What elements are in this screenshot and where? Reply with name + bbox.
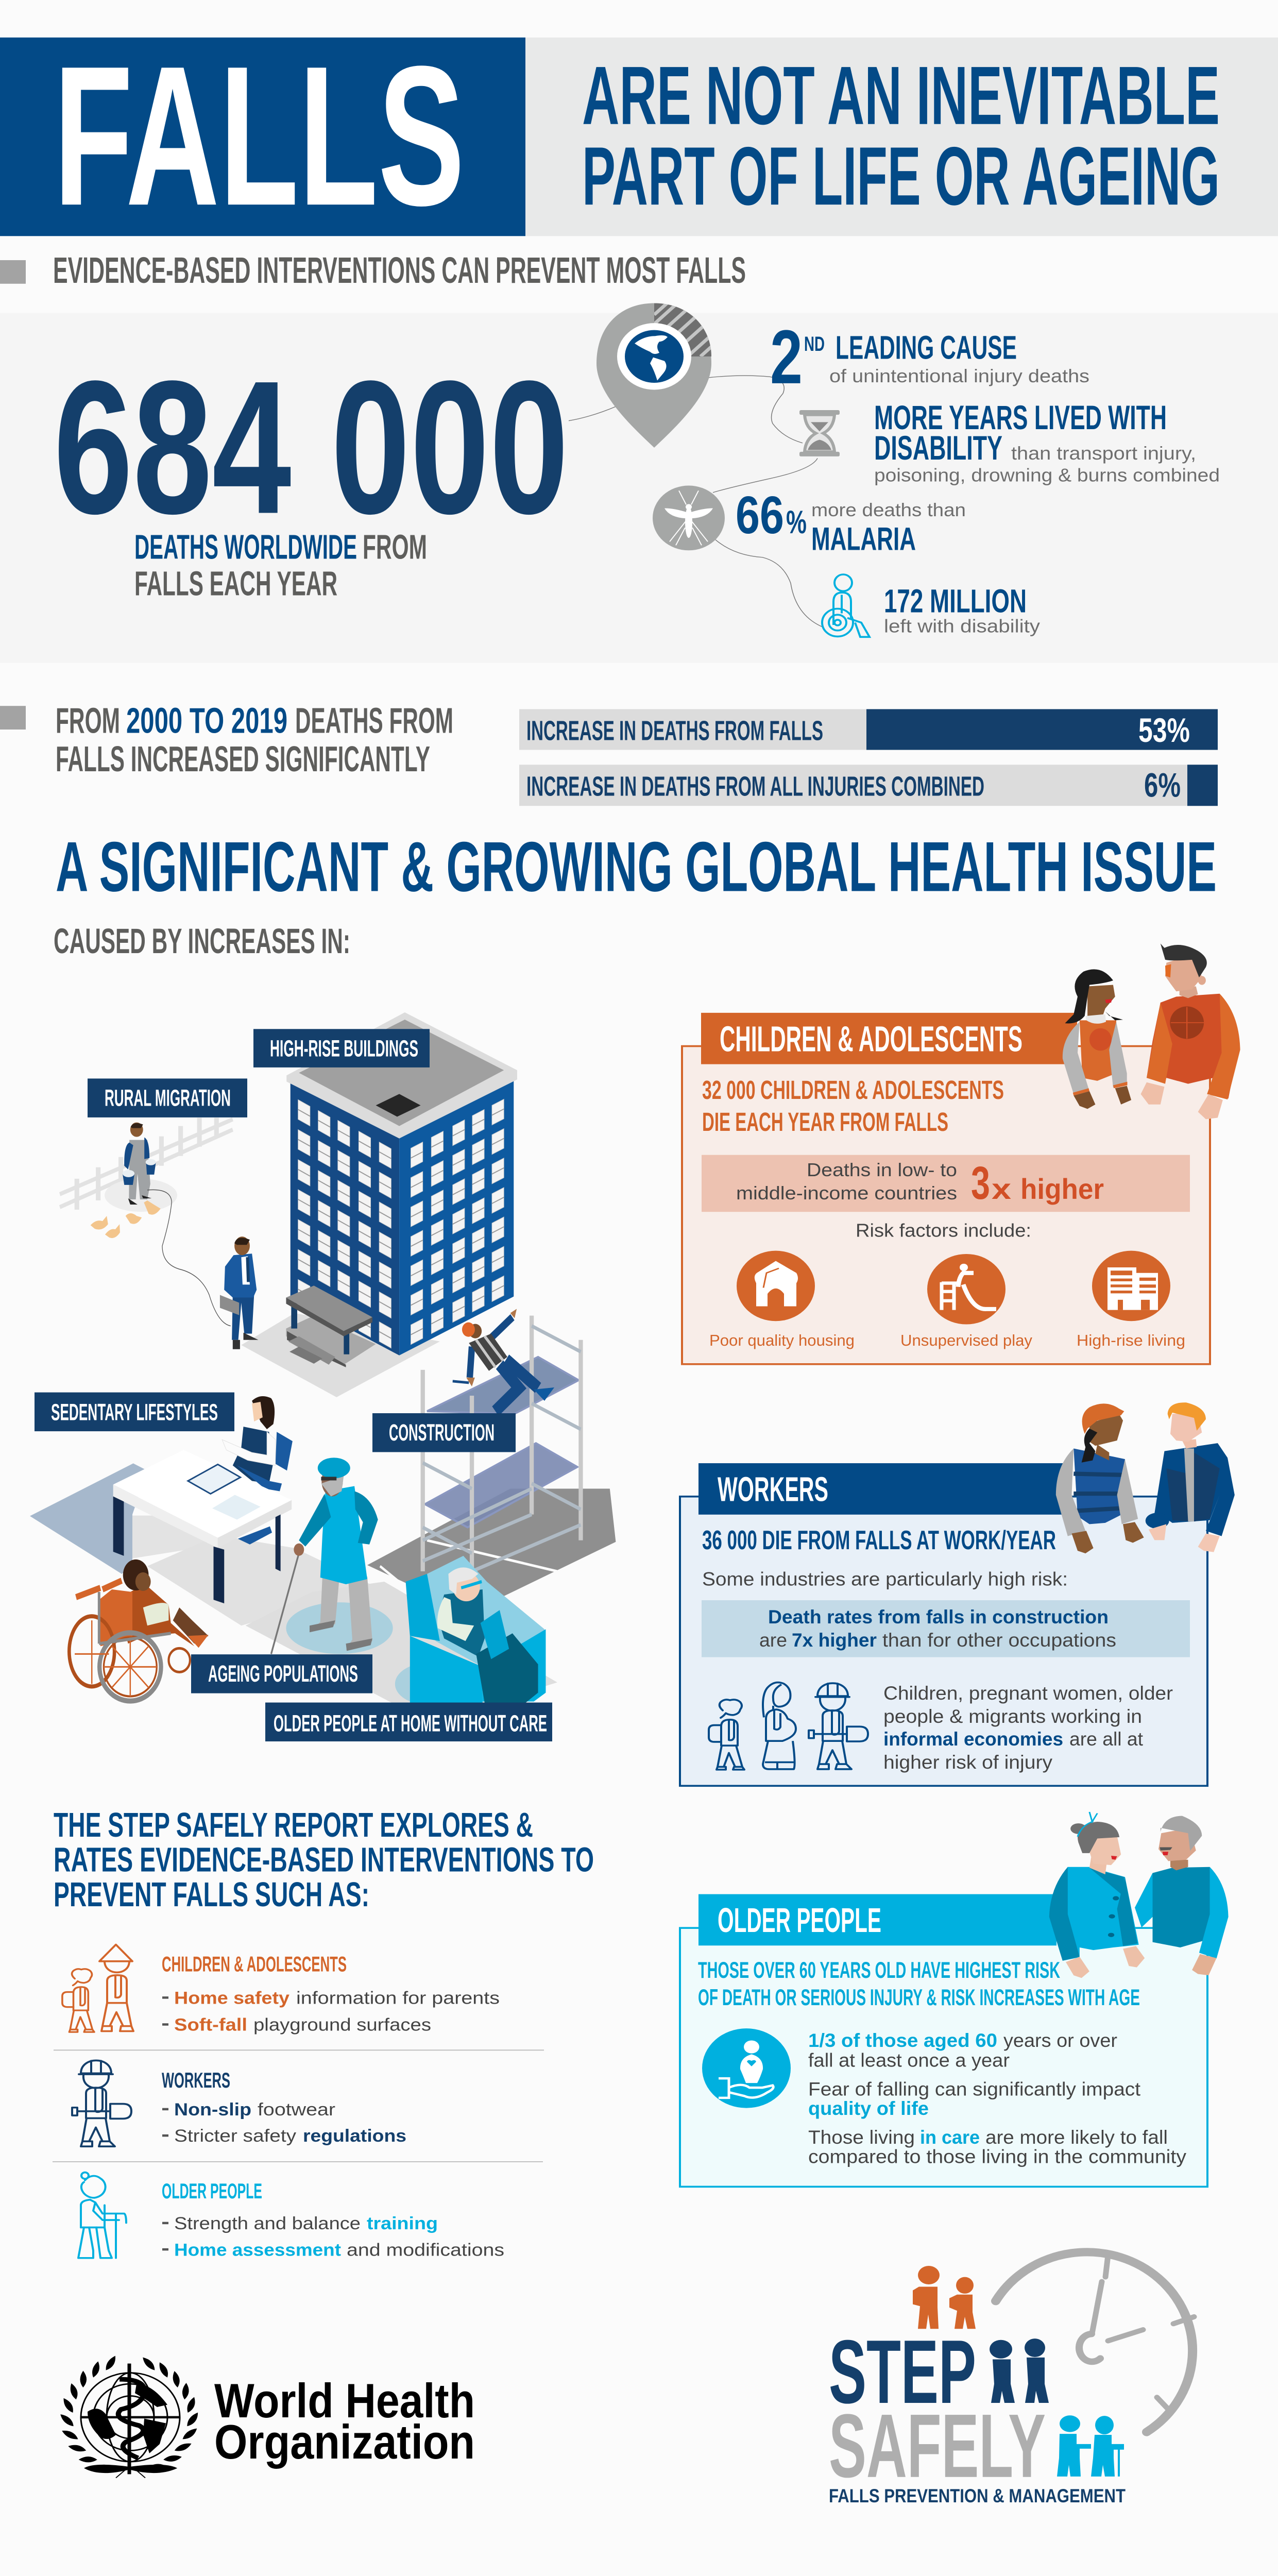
text: older people facts: Fear of falling can significantly impact xyxy=(808,2079,1140,2100)
callout: 7x higher: 7x higher xyxy=(792,1630,877,1651)
icon: mosquito xyxy=(653,485,725,550)
scaffolding xyxy=(423,1316,581,1571)
callout: 3x higher xyxy=(702,1155,1190,1212)
icon: hourglass xyxy=(799,410,840,456)
older woman in armchair xyxy=(395,1556,546,1705)
subheading: caused by: CAUSED BY INCREASES IN: xyxy=(54,922,350,961)
woman at desk xyxy=(222,1396,293,1545)
section: deaths increased 2000 to 2019 xyxy=(0,701,453,779)
older man with cane xyxy=(271,1458,393,1654)
callout: 7x higher xyxy=(702,1600,1190,1657)
wordmark: SAFELY: SAFELY xyxy=(829,2396,1046,2497)
text: informal economies: Children, pregnant women, older xyxy=(883,1683,1173,1704)
stat: 66% malaria: more deaths than xyxy=(811,500,966,520)
label: ageing populations xyxy=(191,1654,372,1693)
wordmark: Organization xyxy=(214,2415,475,2469)
canopy and steps xyxy=(286,1316,376,1365)
intervention text: WORKERS xyxy=(162,2069,230,2093)
icon: poor quality housing xyxy=(737,1251,815,1321)
heading: step safely report: THE STEP SAFELY REPORT EXPLORES & xyxy=(54,1806,533,1844)
stat: 2nd leading cause: ND xyxy=(804,332,825,355)
text: older people facts: compared to those living in the community xyxy=(808,2146,1187,2167)
panel header: CHILDREN & ADOLESCENTS xyxy=(720,1019,1023,1059)
businessman xyxy=(220,1236,259,1349)
section: deaths increased 2000 to 2019: DEATHS FROM xyxy=(295,701,453,740)
stat: 2nd leading cause: LEADING CAUSE xyxy=(836,330,1017,366)
wordmark: STEP: STEP xyxy=(829,2321,976,2422)
floors xyxy=(30,1313,616,1706)
icon: hand holding person with heart xyxy=(702,2028,791,2108)
risk factor labels: High-rise living xyxy=(1077,1331,1185,1349)
intervention: children and adolescents xyxy=(62,1944,500,2035)
key fact xyxy=(702,1076,1004,1137)
icon: worker xyxy=(72,2060,131,2146)
stat: 2nd leading cause: of unintentional injury deaths xyxy=(829,366,1089,387)
key fact: DIE EACH YEAR FROM FALLS xyxy=(702,1108,948,1137)
label: construction xyxy=(372,1413,516,1452)
icon: map pin with globe xyxy=(597,303,711,448)
key fact: 36 000 DIE FROM FALLS AT WORK/YEAR xyxy=(702,1525,1056,1555)
callout: 7x higher: than for other occupations xyxy=(882,1630,1116,1651)
panel header xyxy=(701,1013,1077,1064)
deaths caption: FROM xyxy=(363,528,427,566)
text: informal economies xyxy=(883,1683,1173,1773)
icons: child, pregnant woman, worker xyxy=(709,1683,868,1770)
bar chart: increase in deaths from falls: INCREASE IN DEATHS FROM FALLS xyxy=(526,715,823,747)
stat: 66% malaria: MALARIA xyxy=(811,521,916,557)
stat: 172 million xyxy=(884,583,1040,637)
intervention: older people xyxy=(78,2173,504,2260)
intervention text: Home safety xyxy=(174,1988,289,2008)
subtitle xyxy=(0,250,746,291)
label: older people at home without care: OLDER PEOPLE AT HOME WITHOUT CARE xyxy=(274,1710,547,1737)
callout: 7x higher: Death rates from falls in construction xyxy=(768,1607,1109,1628)
stat: 66% malaria: % xyxy=(786,504,807,540)
intervention text: regulations xyxy=(303,2126,406,2146)
text: older people facts: 1/3 of those aged 60 xyxy=(808,2030,997,2052)
label: high-rise buildings xyxy=(253,1029,430,1067)
panel: key statistics xyxy=(59,303,1219,638)
panel: workers xyxy=(680,1402,1235,1786)
bar chart: increase in deaths from all injuries: 6% xyxy=(1144,766,1181,804)
high-rise building xyxy=(286,1012,517,1367)
intervention text: Strength and balance xyxy=(174,2213,361,2233)
intro text: Some industries are particularly high risk: xyxy=(702,1569,1068,1590)
icon: person in wheelchair xyxy=(822,574,870,637)
icon: older person with cane xyxy=(78,2173,126,2258)
deaths caption: DEATHS WORLDWIDE xyxy=(134,528,357,566)
text: older people facts: are more likely to fall xyxy=(985,2127,1168,2148)
logo: Step Safely xyxy=(829,2252,1194,2507)
text: older people facts: in care xyxy=(920,2127,980,2148)
panel header: OLDER PEOPLE xyxy=(718,1901,881,1939)
fence xyxy=(60,1118,233,1210)
callout: 7x higher: are xyxy=(759,1630,787,1651)
text: older people facts: fall at least once a year xyxy=(808,2050,1010,2071)
panel header xyxy=(698,1463,1064,1515)
risk factors heading: Risk factors include: xyxy=(856,1221,1031,1241)
bar chart: increase in deaths from falls xyxy=(519,709,1218,750)
emblem xyxy=(59,2354,201,2478)
stat: years lived with disability xyxy=(874,398,1220,486)
title banner xyxy=(0,24,1278,247)
illustration: girl and boy xyxy=(1063,943,1240,1119)
illustration: older couple xyxy=(1049,1812,1229,1978)
intervention text: Stricter safety xyxy=(174,2126,296,2146)
intervention text xyxy=(162,1953,500,2035)
callout: 3x higher: higher xyxy=(1020,1174,1104,1205)
intervention text: Non-slip xyxy=(174,2099,251,2120)
callout: 3x higher: x xyxy=(992,1174,1011,1205)
label: construction: CONSTRUCTION xyxy=(389,1419,495,1446)
bar chart: increase in deaths from falls: 53% xyxy=(1138,711,1190,749)
stat: 66% malaria xyxy=(736,485,966,557)
key fact: 32 000 CHILDREN & ADOLESCENTS xyxy=(702,1076,1004,1105)
intervention text: OLDER PEOPLE xyxy=(162,2179,262,2203)
tagline: FALLS PREVENTION & MANAGEMENT xyxy=(829,2486,1126,2507)
heading: step safely report: RATES EVIDENCE-BASED INTERVENTIONS TO xyxy=(54,1840,594,1879)
farmer and chickens xyxy=(91,1123,177,1238)
intervention: workers xyxy=(72,2060,406,2146)
intervention text: information for parents xyxy=(296,1988,500,2008)
key fact xyxy=(698,1957,1140,2011)
intervention text xyxy=(162,2179,504,2260)
heading: step safely report: PREVENT FALLS SUCH AS: xyxy=(54,1875,369,1913)
text: informal economies: higher risk of injury xyxy=(883,1752,1053,1773)
stat: years lived with disability: DISABILITY xyxy=(874,429,1002,467)
deaths caption xyxy=(134,528,427,603)
text: informal economies: people & migrants working in xyxy=(883,1706,1142,1727)
text: older people facts: quality of life xyxy=(808,2098,929,2120)
intervention text: footwear xyxy=(258,2099,335,2120)
intervention text: and modifications xyxy=(347,2240,504,2260)
label: high-rise buildings: HIGH-RISE BUILDINGS xyxy=(270,1036,418,1062)
intervention text: playground surfaces xyxy=(253,2014,431,2035)
stat: 2nd leading cause: 2 xyxy=(770,315,803,400)
person in wheelchair xyxy=(69,1560,209,1701)
stat: 172 million: left with disability xyxy=(884,616,1040,637)
panel header xyxy=(698,1894,1057,1945)
icon: unsupervised play xyxy=(927,1254,1006,1325)
icon: high-rise living xyxy=(1092,1251,1170,1321)
risk factor labels xyxy=(709,1331,1185,1349)
desk xyxy=(113,1450,292,1603)
stat: 66% malaria: 66 xyxy=(736,485,784,545)
logo: World Health Organization xyxy=(59,2354,475,2478)
illustration: two workers xyxy=(1056,1402,1235,1553)
text: informal economies: informal economies xyxy=(883,1729,1063,1750)
panel header: WORKERS xyxy=(718,1470,828,1509)
figures: orange pair xyxy=(913,2266,976,2329)
stat: years lived with disability: than transport injury, xyxy=(1011,444,1196,464)
callout: 3x higher: middle-income countries xyxy=(736,1183,957,1204)
wordmark xyxy=(214,2374,475,2469)
figures: cyan pair xyxy=(1057,2415,1124,2477)
clock xyxy=(996,2252,1194,2432)
title word: FALLS: FALLS xyxy=(54,24,465,247)
falling worker xyxy=(453,1309,554,1411)
callout: 3x higher: 3 xyxy=(971,1158,990,1209)
intervention text: training xyxy=(367,2213,438,2233)
panel: older people xyxy=(680,1812,1229,2187)
text: older people facts: Those living xyxy=(808,2127,915,2148)
intervention text: CHILDREN & ADOLESCENTS xyxy=(162,1953,347,1976)
text: older people facts xyxy=(808,2030,1187,2167)
figures: navy pair xyxy=(990,2338,1049,2403)
label: sedentary lifestyles xyxy=(35,1393,234,1431)
label: ageing populations: AGEING POPULATIONS xyxy=(208,1661,358,1687)
section: deaths increased 2000 to 2019: FROM xyxy=(56,701,120,740)
isometric illustration xyxy=(30,1012,616,1706)
intervention text xyxy=(162,2069,406,2146)
panel: children and adolescents xyxy=(682,943,1240,1364)
section: deaths increased 2000 to 2019: FALLS INCREASED SIGNIFICANTLY xyxy=(56,739,430,779)
big number: 684 000 xyxy=(54,341,569,553)
intervention text: Soft-fall xyxy=(174,2014,247,2035)
connector lines xyxy=(569,376,823,627)
label: sedentary lifestyles: SEDENTARY LIFESTYLES xyxy=(51,1399,218,1426)
callout: 3x higher: Deaths in low- to xyxy=(807,1160,957,1181)
icon: child and parent xyxy=(62,1944,133,2032)
label: rural migration: RURAL MIGRATION xyxy=(105,1085,231,1111)
text: informal economies: are all at xyxy=(1069,1729,1143,1750)
risk factor labels: Poor quality housing xyxy=(709,1331,855,1349)
risk factor labels: Unsupervised play xyxy=(900,1331,1033,1349)
shadow on scaffold floor stripes xyxy=(380,1540,557,1605)
deaths caption: FALLS EACH YEAR xyxy=(134,564,337,603)
label: rural migration xyxy=(88,1078,247,1117)
label: older people at home without care xyxy=(265,1703,552,1741)
migration path line xyxy=(147,1190,231,1326)
stat: 172 million: 172 MILLION xyxy=(884,583,1027,620)
stat: 2nd leading cause xyxy=(770,315,1089,400)
text: older people facts: years or over xyxy=(1003,2030,1117,2052)
heading: step safely report xyxy=(54,1806,594,1913)
section: deaths increased 2000 to 2019: 2000 TO 2019 xyxy=(126,701,287,740)
stat: years lived with disability: poisoning, drowning & burns combined xyxy=(874,465,1220,486)
intervention text: Home assessment xyxy=(174,2240,341,2260)
wordmark: World Health xyxy=(214,2374,475,2428)
